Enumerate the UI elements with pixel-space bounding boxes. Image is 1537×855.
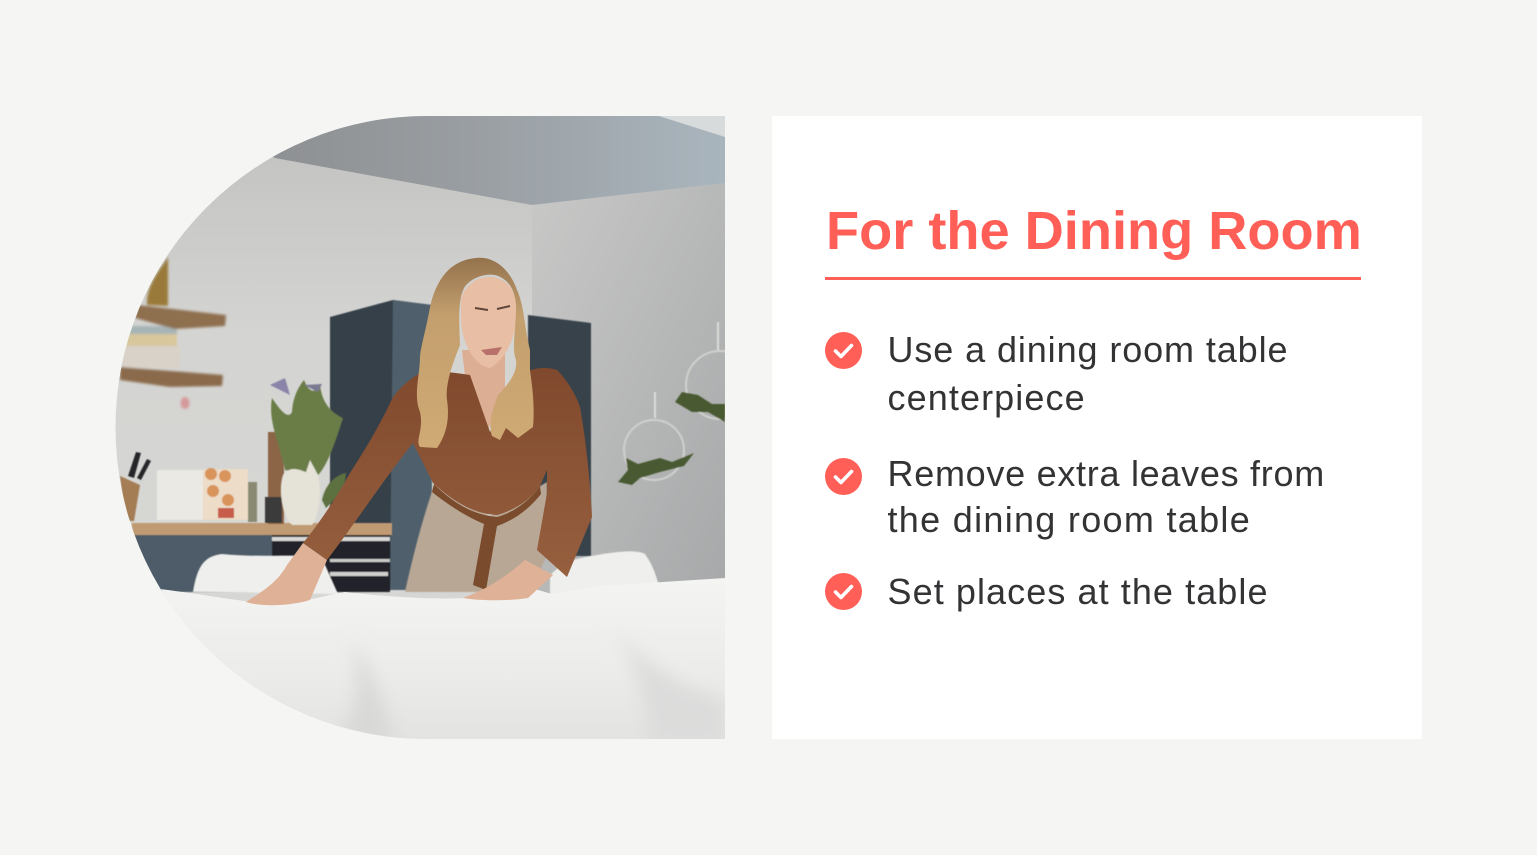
item text: Remove extra leaves from — [888, 453, 1325, 494]
item text: the dining room table — [888, 499, 1251, 540]
arms: left hand — [246, 543, 327, 605]
dining chairs — [192, 550, 658, 594]
white tablecloth — [120, 560, 725, 745]
item text — [888, 453, 1325, 540]
checklist item 3 — [825, 571, 1269, 612]
kitchen shelves and books — [120, 257, 226, 409]
item text: Use a dining room table — [888, 329, 1288, 370]
checklist item 2 — [825, 453, 1325, 540]
hair — [417, 258, 534, 448]
skirt — [405, 482, 547, 592]
item text — [888, 329, 1288, 418]
icon: check — [825, 332, 862, 369]
woman — [246, 258, 592, 605]
face — [461, 277, 517, 368]
icon: check — [825, 458, 862, 495]
checklist item 1 — [825, 329, 1288, 418]
blouse and arms — [303, 368, 592, 577]
tall dark cabinets — [330, 300, 591, 590]
heading underline — [825, 277, 1361, 280]
neck — [462, 350, 505, 430]
item text: centerpiece — [888, 377, 1086, 418]
room walls and ceiling — [116, 116, 725, 602]
item text: Set places at the table — [888, 571, 1269, 612]
panel: dining room checklist — [772, 116, 1422, 739]
kitchen counter with cookbook and vase — [120, 432, 392, 592]
heading: For the Dining Room — [826, 201, 1362, 261]
potted plant with white rabbit vase — [270, 378, 346, 525]
wall wreaths — [618, 322, 725, 486]
belt — [432, 484, 541, 590]
arms: right hand — [463, 560, 553, 600]
icon: check — [825, 573, 862, 610]
photo: woman smoothing a white tablecloth in a kitchen — [116, 116, 725, 739]
